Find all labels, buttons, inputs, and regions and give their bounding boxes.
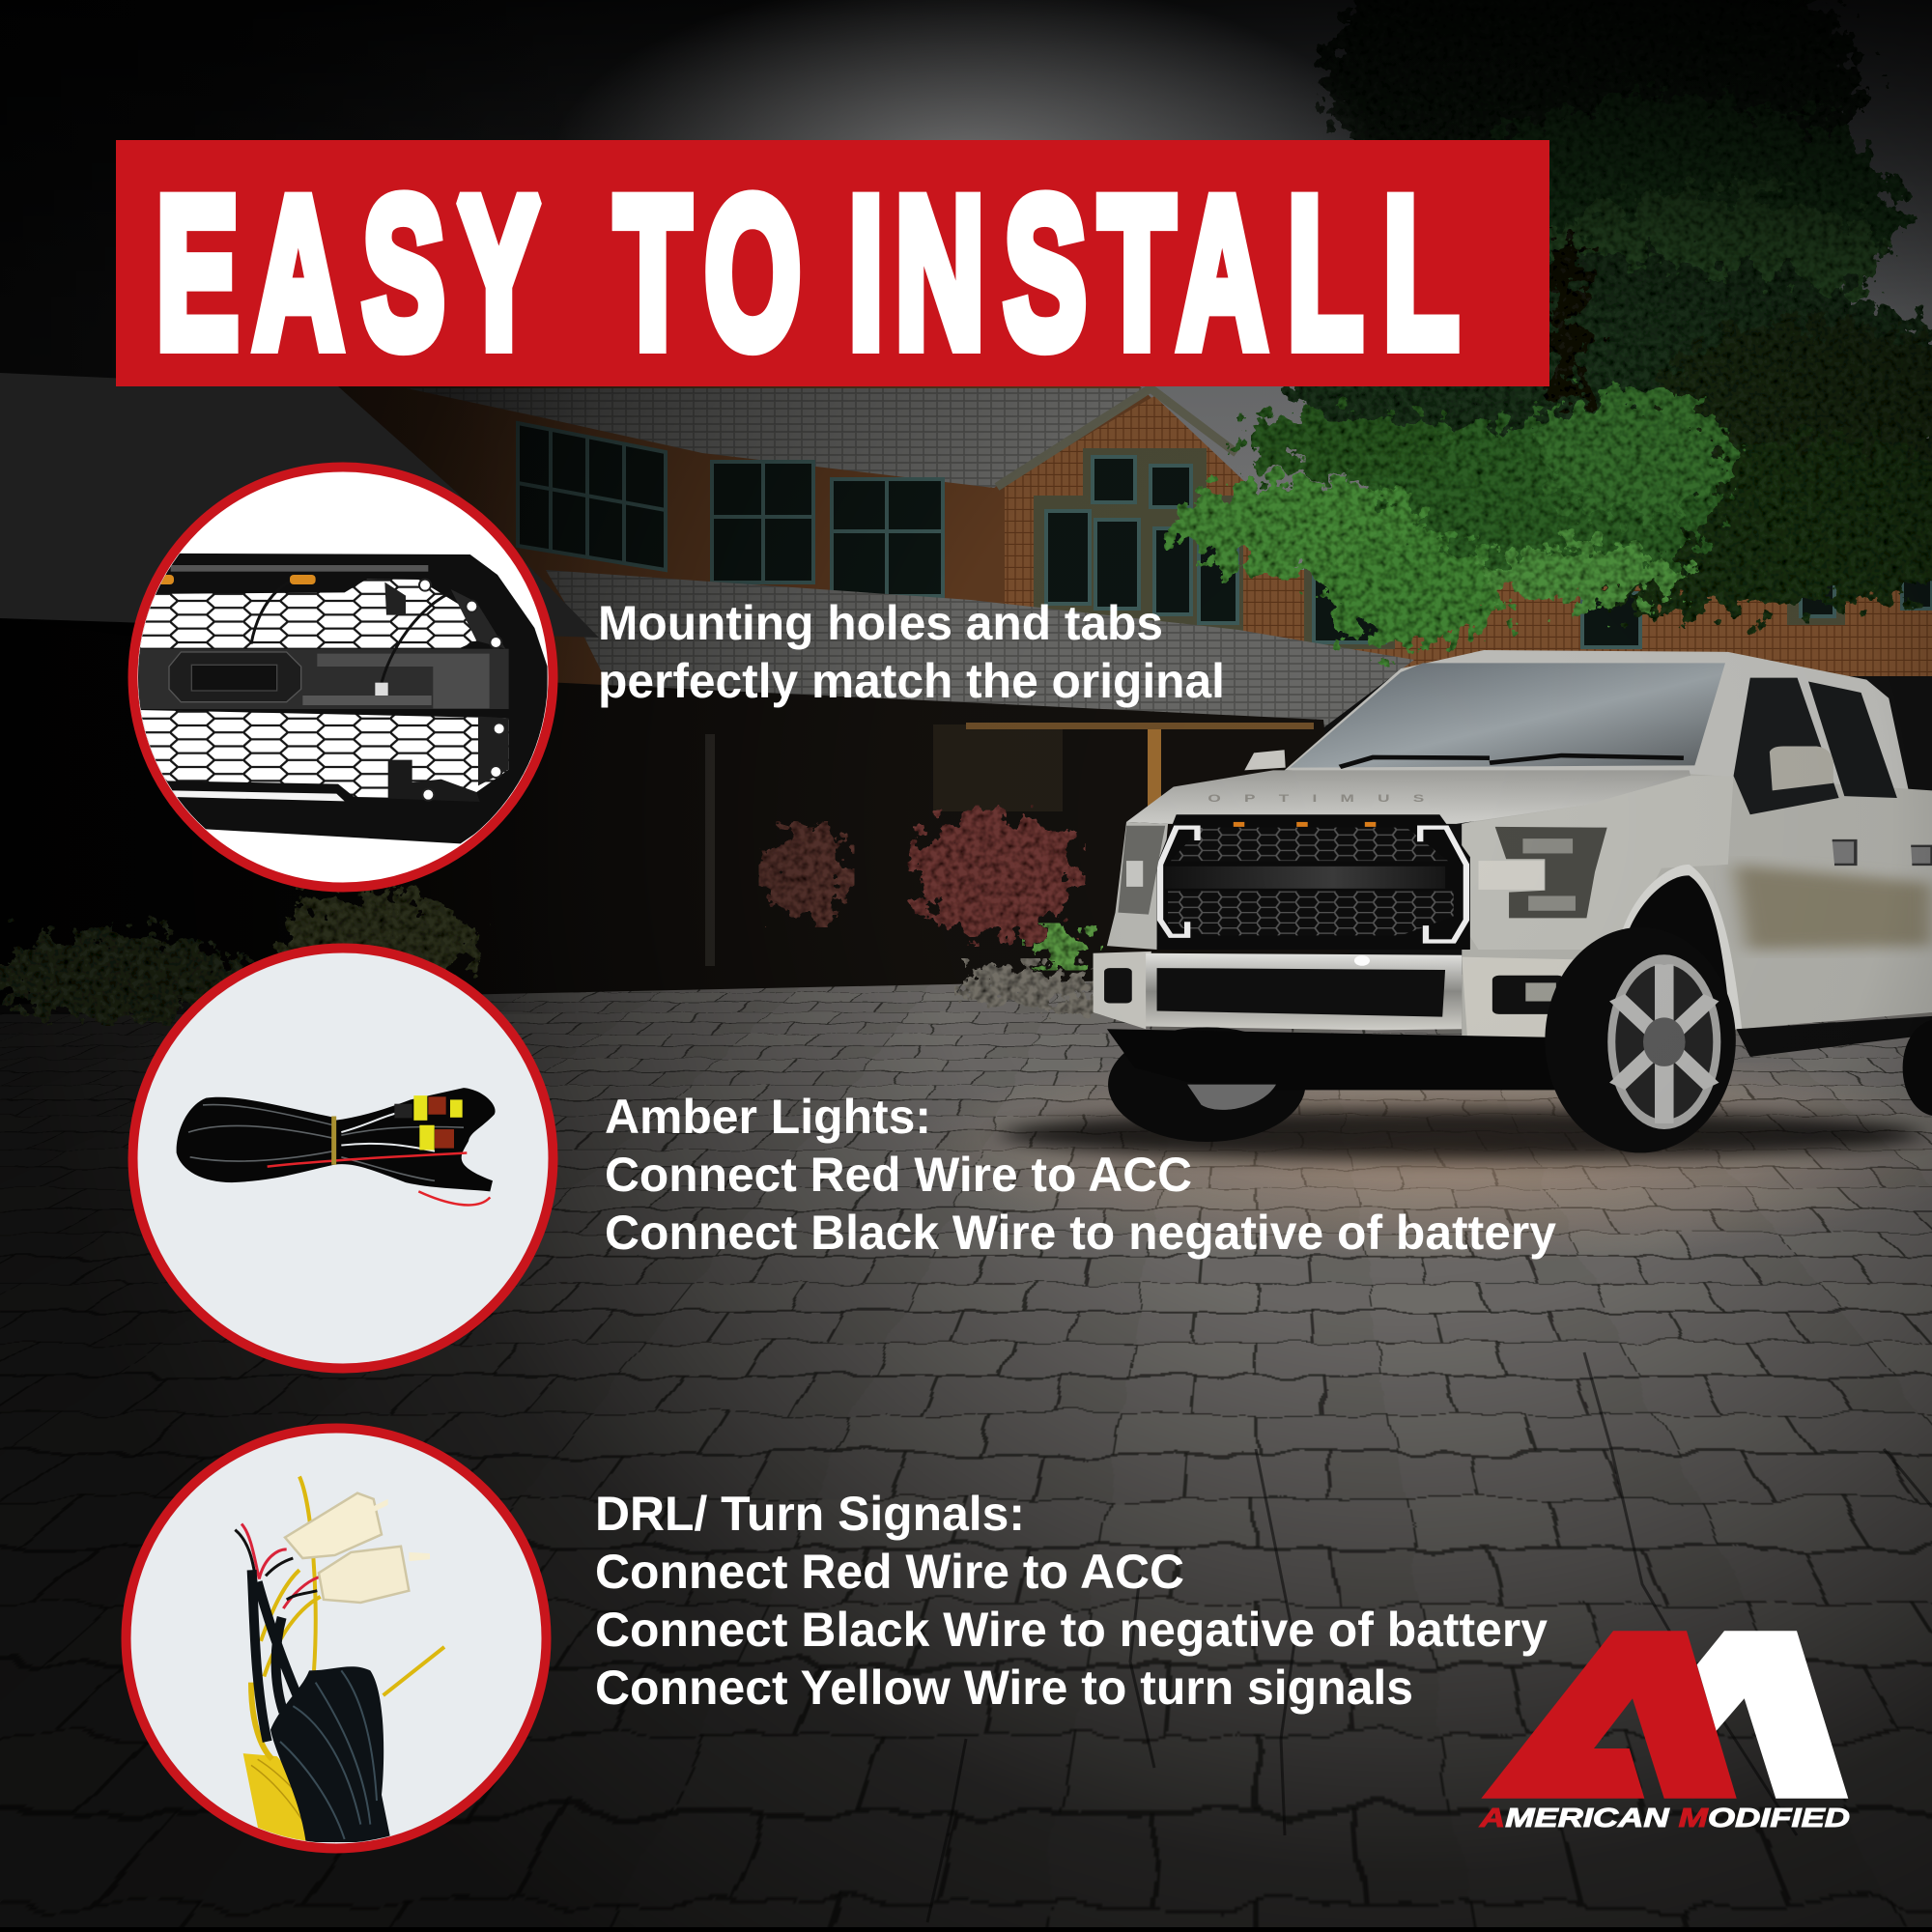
side windows [1734, 678, 1839, 814]
title text: EASY TO INSTALL [156, 155, 1459, 392]
circle 3: turn signal wires photo [126, 1428, 547, 1849]
circle 2: wiring harness photo [133, 949, 553, 1368]
porch shadow area [0, 618, 1352, 1005]
pine tree foliage [1174, 0, 1932, 647]
truck [1002, 650, 1932, 1160]
fender panel [1107, 822, 1168, 950]
bottom edge strip [0, 1927, 1932, 1932]
caption 2 [605, 1090, 1556, 1260]
harness illustration [177, 1088, 496, 1205]
caption 3: DRL/ Turn Signals: [595, 1487, 1025, 1541]
caption 1: perfectly match the original [598, 654, 1225, 708]
truck cab roof [1285, 650, 1932, 887]
driveway warm light [869, 1063, 1932, 1275]
left side dark house roof [0, 373, 599, 638]
grille [1157, 814, 1470, 950]
caption 3 [595, 1487, 1548, 1715]
wires illustration [235, 1477, 444, 1842]
front right wheel [1545, 927, 1736, 1152]
logo: American Modified [1479, 1631, 1850, 1833]
door reflection [1734, 865, 1932, 950]
upper left fade [0, 0, 599, 1014]
sky [0, 0, 1932, 618]
foreground: banner, circles, captions and logo [116, 140, 1850, 1853]
left rim [1187, 1085, 1276, 1110]
caption 1: Mounting holes and tabs [598, 596, 1163, 650]
wipers [1340, 755, 1684, 767]
gable trim [997, 388, 1236, 487]
title banner [116, 140, 1549, 392]
lower valance [1107, 1029, 1604, 1090]
front left tire [1108, 1027, 1305, 1142]
top fade [0, 0, 1932, 309]
left foliage [0, 889, 473, 1019]
hood lettering: OPTIMUS [1208, 792, 1425, 805]
upper roof [407, 388, 1151, 488]
caption 2: Amber Lights: [605, 1090, 931, 1144]
shrubs and retaining stones [763, 809, 1099, 1016]
door mirror [1770, 746, 1833, 790]
house upper wall [328, 386, 1256, 696]
porch post and stone wall [933, 723, 1314, 811]
truck ground shadow [1002, 1109, 1922, 1160]
caption 2: Connect Black Wire to negative of battery [605, 1206, 1556, 1260]
windshield [1290, 663, 1725, 768]
driveway cracks [927, 1352, 1932, 1922]
circle 1: grille back photo [128, 468, 553, 887]
passenger mirror [1244, 750, 1286, 770]
caption 3: Connect Black Wire to negative of battery [595, 1603, 1548, 1657]
caption 3: Connect Yellow Wire to turn signals [595, 1661, 1413, 1715]
logo wordmark: AMERICAN MODIFIED [1479, 1803, 1850, 1833]
sky glow behind banner [541, 0, 1391, 386]
caption 2: Connect Red Wire to ACC [605, 1148, 1192, 1202]
upper floor windows [518, 423, 1932, 647]
caption 1 [598, 596, 1225, 708]
headlights [1118, 826, 1607, 918]
door handles [1833, 840, 1932, 865]
porch roof [546, 570, 1414, 729]
house shingled siding [1005, 396, 1932, 676]
central tree trunk [705, 734, 715, 966]
caption 3: Connect Red Wire to ACC [595, 1545, 1184, 1599]
background: brick driveway [0, 974, 1932, 1927]
truck body side [1462, 774, 1932, 1038]
hood [1126, 770, 1694, 824]
bumper [1094, 952, 1623, 1038]
rocker and rear wheel [1736, 1016, 1932, 1116]
wheel arch [1617, 865, 1742, 1038]
window surrounds [1034, 448, 1845, 649]
grille illustration [128, 554, 548, 843]
